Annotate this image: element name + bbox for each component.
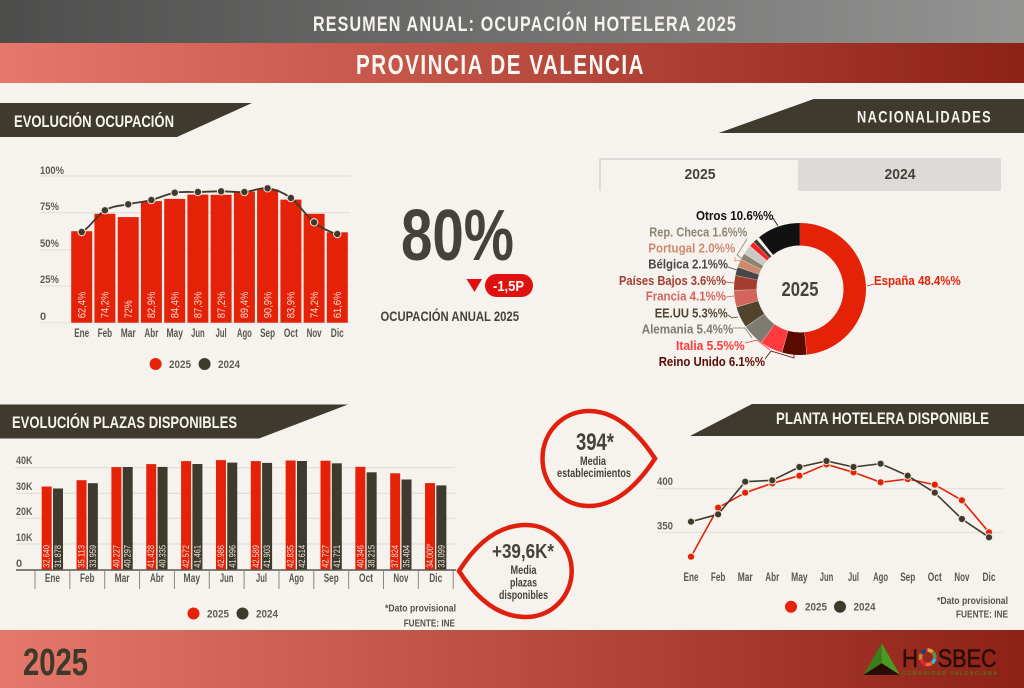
chart: plazas disponibles: 42.835 xyxy=(286,545,296,568)
source note: planta hotelera: FUENTE: INE xyxy=(956,610,1008,620)
chart: planta hotelera: Dic xyxy=(982,572,996,584)
chart: plazas disponibles: 40.227 xyxy=(111,545,121,568)
chart: evolución ocupación: 0 xyxy=(40,311,46,323)
chart: plazas disponibles: 40.297 xyxy=(123,545,133,568)
chart: evolución ocupación: Ene xyxy=(74,328,89,340)
source note: plazas xyxy=(385,604,456,630)
tabs: year selector xyxy=(599,158,1001,191)
heading: evolución plazas disponibles: EVOLUCIÓN PLAZAS DISPONIBLES xyxy=(12,413,237,432)
chart: plazas disponibles: Oct xyxy=(359,573,373,585)
chart: evolución ocupación: 61,6% xyxy=(332,291,344,318)
tabs: year selector: 2025 xyxy=(684,166,716,183)
donut chart: nacionalidades: Alemania 5.4%% xyxy=(642,322,734,337)
heading: evolución ocupación xyxy=(0,103,252,137)
chart: evolución ocupación: 72% xyxy=(123,300,135,318)
chart: plazas disponibles: 40K xyxy=(16,455,33,467)
legend: ocupación: 2024 xyxy=(218,359,241,371)
chart: plazas disponibles: 42.727 xyxy=(320,545,330,568)
legend: ocupación xyxy=(150,358,241,371)
subtitle band: province xyxy=(0,43,1024,83)
chart: plazas disponibles: Ago xyxy=(289,573,304,585)
chart: plazas disponibles: 0 xyxy=(16,558,22,570)
callout: media plazas disponibles: +39,6K* xyxy=(492,540,554,563)
chart: planta hotelera: Jun xyxy=(820,572,833,584)
chart: evolución ocupación: 89,4% xyxy=(239,291,251,318)
legend: planta hotelera: 2025 xyxy=(805,602,827,614)
source note: planta hotelera xyxy=(937,596,1008,620)
legend: plazas xyxy=(188,608,279,620)
chart: planta hotelera: Nov xyxy=(954,572,970,584)
chart: evolución ocupación: Oct xyxy=(284,328,298,340)
footer band: 2025 xyxy=(23,642,88,684)
donut chart: nacionalidades: España 48.4%% xyxy=(874,273,961,288)
chart: plazas disponibles: Nov xyxy=(393,573,409,585)
chart: plazas disponibles: 30K xyxy=(16,481,33,493)
chart: evolución ocupación: Nov xyxy=(307,328,322,340)
legend: plazas: 2024 xyxy=(256,608,279,620)
donut chart: nacionalidades: Otros 10.6%% xyxy=(696,208,774,223)
chart: plazas disponibles: Feb xyxy=(80,573,94,585)
chart: evolución ocupación: 62,4% xyxy=(76,291,88,318)
logo: Hosbec: SBEC xyxy=(938,645,997,673)
chart: evolución ocupación: 90,9% xyxy=(262,291,274,318)
chart: evolución ocupación: May xyxy=(166,328,183,340)
chart: plazas disponibles: 41.428 xyxy=(146,545,156,568)
chart: plazas disponibles: 20K xyxy=(16,506,33,518)
logo: Hosbec: COMUNIDAD VALENCIANA xyxy=(902,671,997,677)
chart: plazas disponibles: Ene xyxy=(45,573,60,585)
tabs: year selector: 2024 xyxy=(884,166,916,183)
donut chart: nacionalidades: Francia 4.1%% xyxy=(646,289,726,304)
donut chart: nacionalidades: Reino Unido 6.1%% xyxy=(659,354,765,369)
chart: evolución ocupación: Dic xyxy=(331,328,344,340)
chart: planta hotelera: Ene xyxy=(684,572,698,584)
chart: evolución ocupación: Jun xyxy=(191,328,205,340)
chart: evolución ocupación: Sep xyxy=(260,328,275,340)
donut chart: nacionalidades: Bélgica 2.1%% xyxy=(648,256,728,271)
footer band xyxy=(0,630,1024,688)
chart: evolución ocupación: Mar xyxy=(121,328,136,340)
chart: plazas disponibles: 41.996 xyxy=(227,545,237,568)
chart: planta hotelera: 350 xyxy=(657,520,673,532)
callout: media establecimientos: establecimientos xyxy=(557,466,631,480)
chart: plazas disponibles: 35.113 xyxy=(76,545,86,568)
chart: plazas disponibles xyxy=(15,455,456,589)
chart: plazas disponibles: Sep xyxy=(324,573,339,585)
chart: evolución ocupación: Ago xyxy=(237,328,252,340)
chart: plazas disponibles: 42.572 xyxy=(181,545,191,568)
source note: planta hotelera: *Dato provisional xyxy=(937,596,1008,607)
chart: evolución ocupación: 83,9% xyxy=(286,291,298,318)
chart: plazas disponibles: 33.099 xyxy=(436,545,446,568)
title band xyxy=(0,0,1024,43)
chart: plazas disponibles: 32.640 xyxy=(42,545,52,568)
chart: plazas disponibles: 34.000* xyxy=(425,543,435,568)
kpi: ocupación anual xyxy=(380,196,533,324)
chart: evolución ocupación: 87,2% xyxy=(216,291,228,318)
chart: evolución ocupación: 100% xyxy=(40,165,64,177)
callout: media plazas disponibles: plazas xyxy=(510,576,537,590)
chart: plazas disponibles: 41.903 xyxy=(262,545,272,568)
chart: planta hotelera: 400 xyxy=(657,476,673,488)
chart: planta hotelera: Oct xyxy=(928,572,942,584)
chart: planta hotelera: Abr xyxy=(765,572,780,584)
chart: plazas disponibles: 40.335 xyxy=(158,545,168,568)
subtitle band: province: PROVINCIA DE VALENCIA xyxy=(356,49,645,80)
chart: plazas disponibles: 40.346 xyxy=(355,545,365,568)
chart: plazas disponibles: Jul xyxy=(256,573,267,585)
chart: plazas disponibles: Mar xyxy=(115,573,130,585)
callout: media establecimientos xyxy=(542,411,655,506)
chart: evolución ocupación: 75% xyxy=(40,201,59,213)
chart: plazas disponibles: May xyxy=(184,573,200,585)
kpi: ocupación anual: -1,5P xyxy=(493,278,524,295)
logo: Hosbec xyxy=(863,643,997,677)
chart: plazas disponibles: 42.986 xyxy=(216,545,226,568)
chart: plazas disponibles: Jun xyxy=(220,573,233,585)
chart: plazas disponibles: Dic xyxy=(429,573,443,585)
chart: evolución ocupación: 74,2% xyxy=(309,291,321,318)
donut chart: nacionalidades xyxy=(619,208,961,369)
donut chart: nacionalidades: EE.UU 5.3%% xyxy=(655,306,728,321)
donut chart: nacionalidades: Portugal 2.0%% xyxy=(648,240,736,255)
title band: RESUMEN ANUAL: OCUPACIÓN HOTELERA 2025 xyxy=(313,12,737,36)
legend: planta hotelera: 2024 xyxy=(854,602,876,614)
chart: planta hotelera: Mar xyxy=(738,572,753,584)
chart: evolución ocupación: Jul xyxy=(216,328,227,340)
chart: plazas disponibles: Abr xyxy=(150,573,164,585)
chart: plazas disponibles: 41.721 xyxy=(332,545,342,568)
kpi: ocupación anual: OCUPACIÓN ANUAL 2025 xyxy=(380,307,519,324)
chart: planta hotelera: Sep xyxy=(900,572,915,584)
chart: planta hotelera: Jul xyxy=(848,572,859,584)
donut chart: nacionalidades: 2025 xyxy=(782,279,818,301)
kpi: ocupación anual: 80% xyxy=(401,196,514,276)
callout: media plazas disponibles: Media xyxy=(510,563,537,577)
chart: plazas disponibles: 41.461 xyxy=(192,545,202,568)
chart: plazas disponibles: 42.614 xyxy=(297,545,307,568)
chart: evolución ocupación: 84,4% xyxy=(170,291,182,318)
callout: media establecimientos: Media xyxy=(580,454,606,468)
chart: evolución ocupación: 74,2% xyxy=(100,291,112,318)
chart: evolución ocupación: Abr xyxy=(144,328,159,340)
legend: planta hotelera xyxy=(785,601,876,614)
donut chart: nacionalidades: Rep. Checa 1.6%% xyxy=(649,224,748,239)
chart: plazas disponibles: 31.878 xyxy=(53,545,63,568)
chart: evolución ocupación: 25% xyxy=(40,274,59,286)
chart: plazas disponibles: 42.589 xyxy=(251,545,261,568)
heading: evolución ocupación: EVOLUCIÓN OCUPACIÓN xyxy=(14,112,174,131)
donut chart: nacionalidades: Italia 5.5%% xyxy=(676,338,745,353)
heading: evolución plazas disponibles xyxy=(0,404,348,438)
legend: plazas: 2025 xyxy=(207,608,229,620)
source note: plazas: FUENTE: INE xyxy=(404,619,455,630)
chart: evolución ocupación xyxy=(40,165,350,340)
chart: plazas disponibles: 38.215 xyxy=(367,545,377,568)
callout: media establecimientos: 394* xyxy=(576,429,615,456)
chart: evolución ocupación: 50% xyxy=(40,238,59,250)
chart: plazas disponibles: 35.404 xyxy=(402,545,412,568)
chart: planta hotelera: Ago xyxy=(873,572,888,584)
chart: planta hotelera: Feb xyxy=(711,572,725,584)
chart: planta hotelera: May xyxy=(791,572,808,584)
heading: nacionalidades xyxy=(719,99,1024,133)
chart: plazas disponibles: 37.824 xyxy=(390,545,400,568)
heading: planta hotelera disponible xyxy=(690,404,1024,436)
donut chart: nacionalidades: Países Bajos 3.6%% xyxy=(619,273,726,288)
chart: evolución ocupación: 87,3% xyxy=(193,291,205,318)
chart: planta hotelera xyxy=(657,457,1003,584)
legend: ocupación: 2025 xyxy=(169,359,191,371)
logo: Hosbec: H xyxy=(902,645,918,673)
chart: evolución ocupación: Feb xyxy=(98,328,112,340)
chart: plazas disponibles: 33.959 xyxy=(88,545,98,568)
chart: plazas disponibles: 10K xyxy=(16,532,33,544)
source note: plazas: *Dato provisional xyxy=(385,604,456,615)
callout: media plazas disponibles: disponibles xyxy=(499,588,548,602)
chart: evolución ocupación: 82,9% xyxy=(146,291,158,318)
callout: media plazas disponibles xyxy=(459,525,572,617)
